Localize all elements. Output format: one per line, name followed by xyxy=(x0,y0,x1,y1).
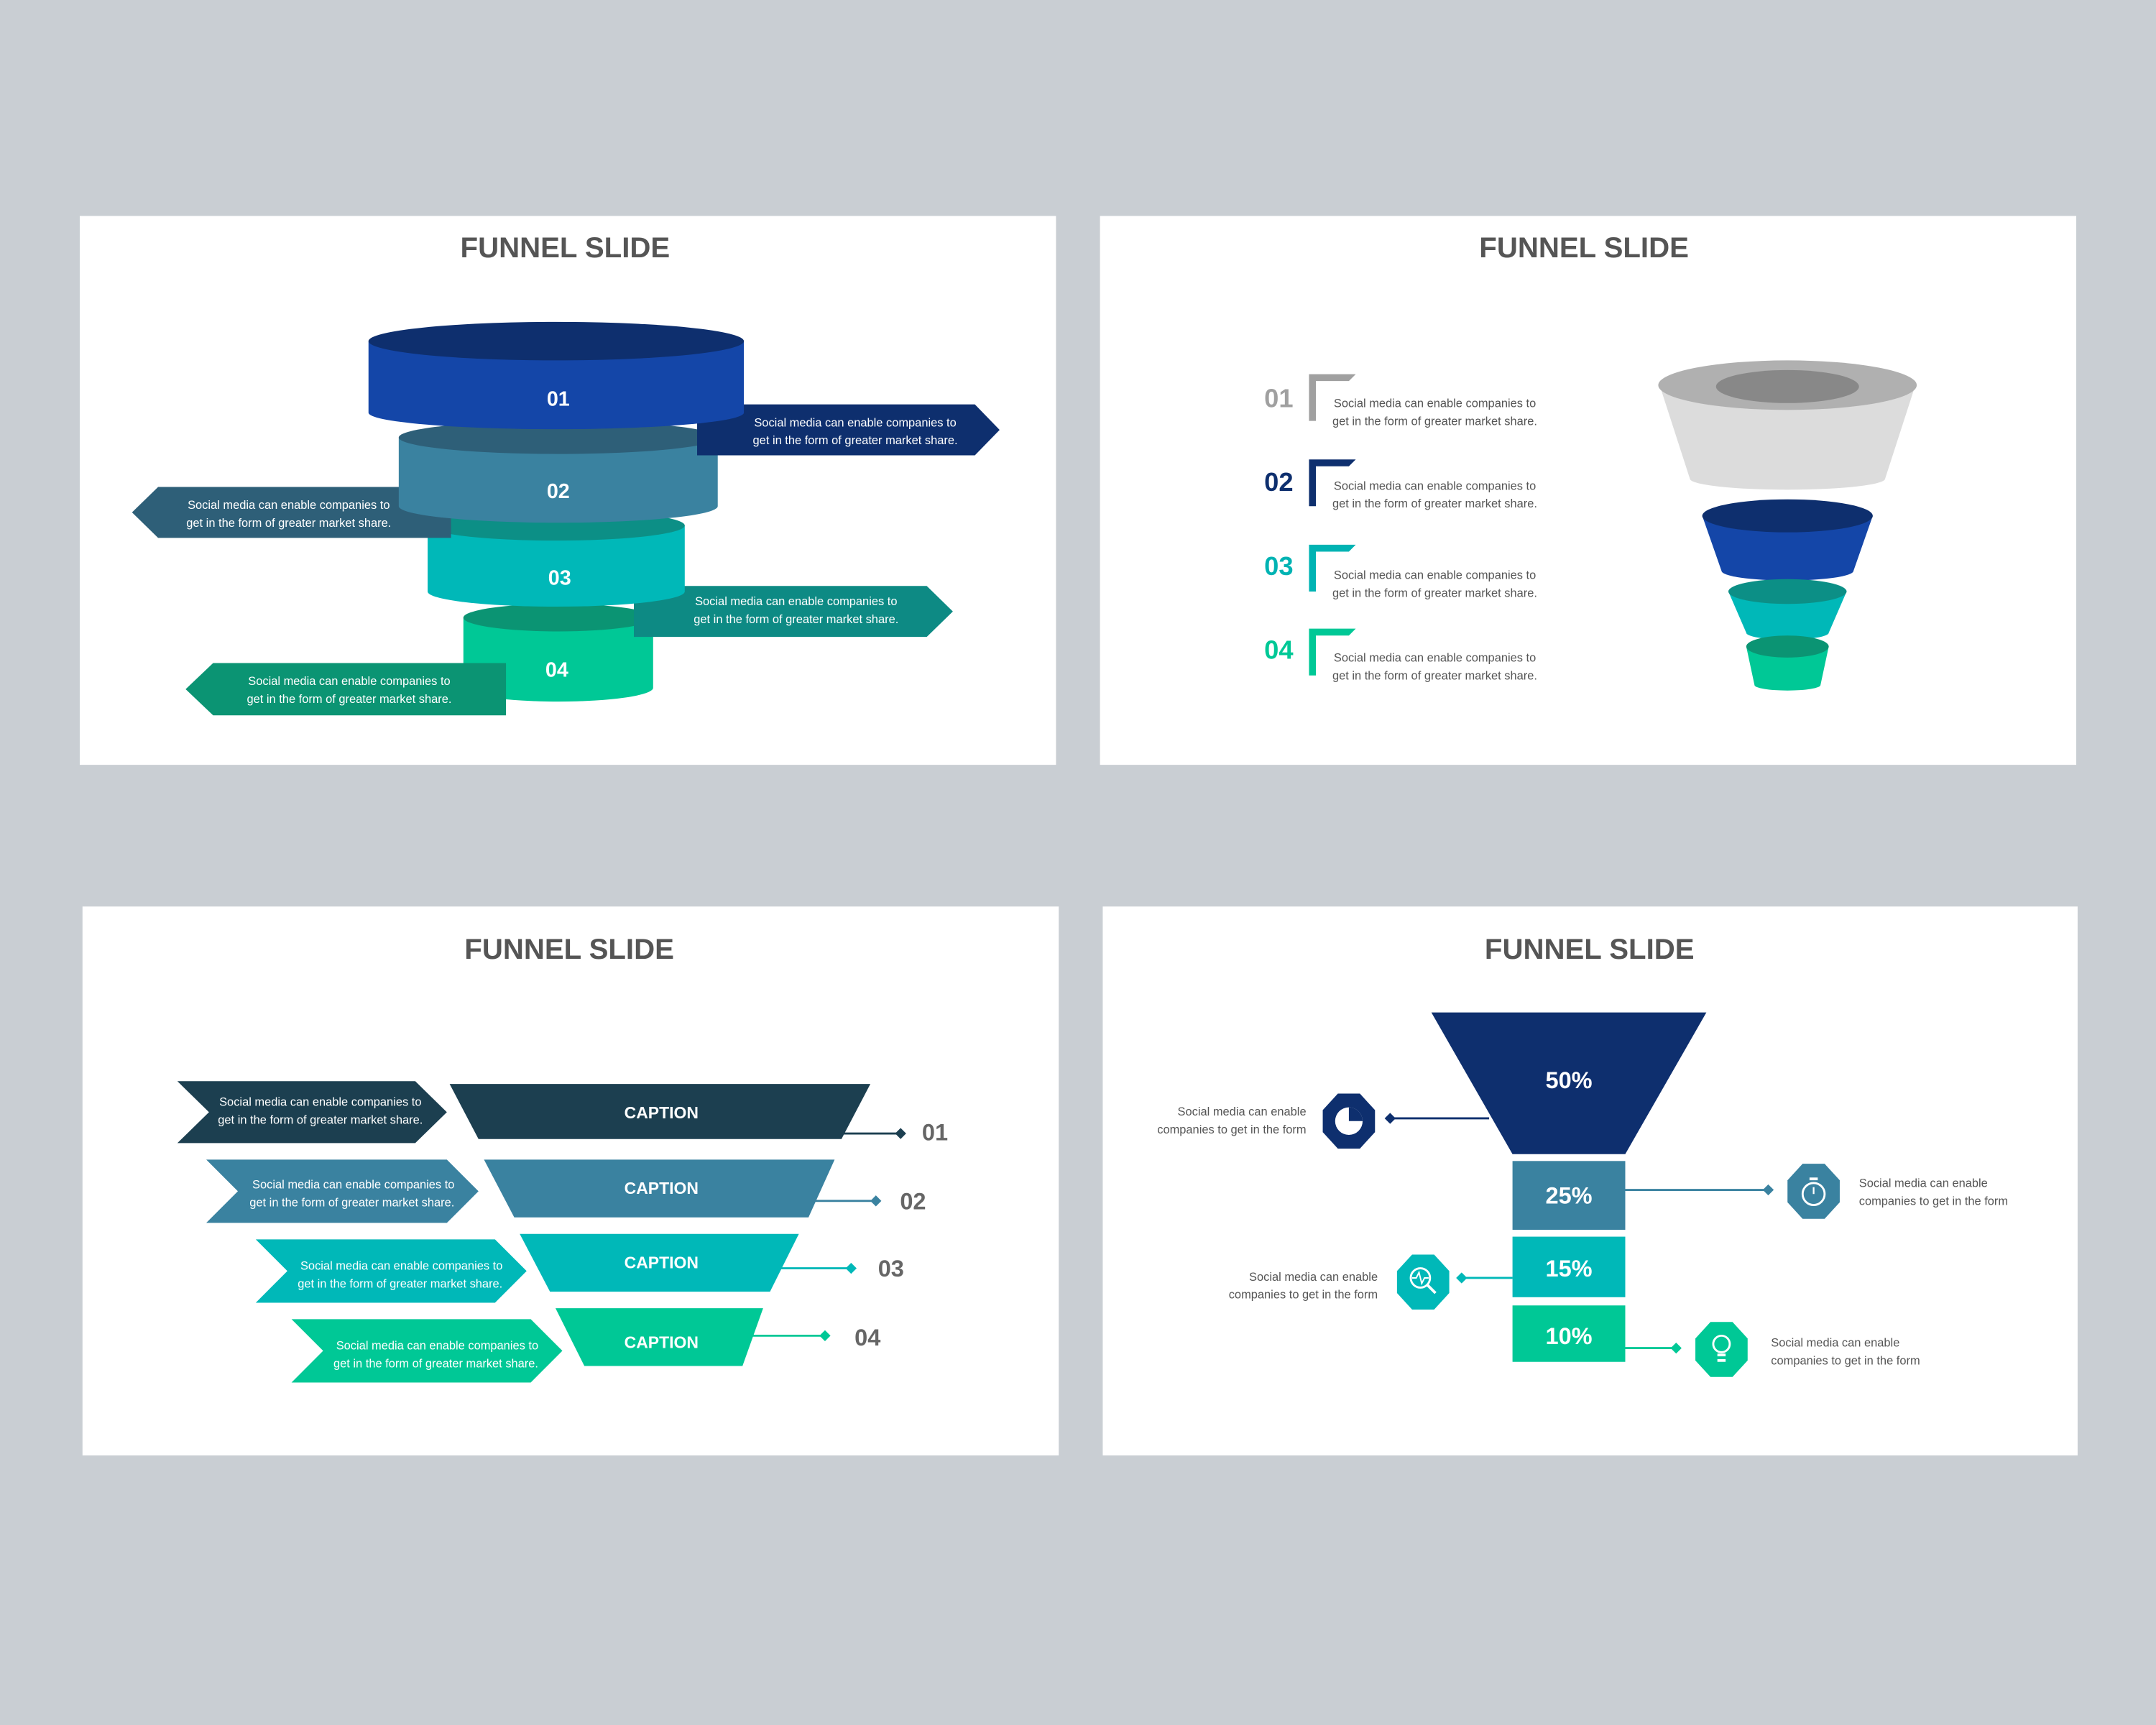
funnel 50% xyxy=(1432,1013,1706,1154)
heading: FUNNEL SLIDE xyxy=(464,933,674,965)
callout 1 xyxy=(697,405,1000,455)
callout 1: get in the form of greater market share. xyxy=(753,434,958,447)
bar 15%: 15% xyxy=(1545,1256,1593,1282)
funnel 50%: 50% xyxy=(1545,1067,1593,1093)
funnel: gray top xyxy=(1658,360,1917,489)
item 02: 02 xyxy=(1264,467,1294,497)
row 04: Social media can enable companies to xyxy=(336,1340,538,1353)
bar 10%: 10% xyxy=(1545,1323,1593,1349)
row 02: get in the form of greater market share. xyxy=(249,1196,454,1209)
item 03: 03 xyxy=(1264,551,1294,581)
bar 25% xyxy=(1513,1161,1625,1230)
row 01: Social media can enable companies to xyxy=(219,1096,421,1109)
item 04: get in the form of greater market share. xyxy=(1332,669,1537,682)
row 02 xyxy=(206,1159,926,1223)
callout 3: Social media can enable companies to xyxy=(695,595,897,608)
callout: stopwatch: Social media can enable xyxy=(1859,1177,1988,1190)
callout: lightbulb: Social media can enable xyxy=(1771,1337,1899,1350)
callout 4: get in the form of greater market share. xyxy=(247,693,451,706)
item 02: Social media can enable companies to xyxy=(1334,479,1536,492)
callout 1: Social media can enable companies to xyxy=(754,416,957,429)
row 04: get in the form of greater market share. xyxy=(333,1357,538,1370)
funnel: blue xyxy=(1703,500,1873,581)
callout: pie chart: companies to get in the form xyxy=(1157,1123,1307,1136)
row 02: CAPTION xyxy=(625,1179,699,1197)
callout: magnifier: companies to get in the form xyxy=(1229,1289,1378,1302)
callout: pie chart: Social media can enable xyxy=(1178,1105,1307,1118)
item 03 xyxy=(1264,545,1537,600)
item 04 xyxy=(1264,629,1537,682)
callout: lightbulb xyxy=(1625,1322,1920,1377)
callout 4: Social media can enable companies to xyxy=(248,675,451,688)
row 02: 02 xyxy=(900,1188,926,1214)
heading: FUNNEL SLIDE xyxy=(1479,231,1689,264)
row 04: 04 xyxy=(854,1325,880,1351)
item 01: 01 xyxy=(1264,384,1294,413)
heading: FUNNEL SLIDE xyxy=(1485,933,1695,965)
callout: stopwatch: companies to get in the form xyxy=(1859,1195,2008,1208)
bar 15% xyxy=(1513,1237,1625,1297)
callout 2: get in the form of greater market share. xyxy=(186,517,391,530)
item 02 xyxy=(1264,459,1537,510)
row 03: 03 xyxy=(878,1256,904,1282)
item 01: Social media can enable companies to xyxy=(1334,397,1536,410)
bar 25%: 25% xyxy=(1545,1183,1593,1209)
row 01: 01 xyxy=(922,1120,948,1146)
callout 2: Social media can enable companies to xyxy=(188,499,390,512)
cylinder 2 xyxy=(399,421,718,523)
cylinder 1: 01 xyxy=(547,388,570,411)
item 01: get in the form of greater market share. xyxy=(1332,415,1537,428)
panel: caption funnel xyxy=(83,906,1059,1455)
panel: cylinder funnel xyxy=(80,216,1056,765)
cylinder 2: 02 xyxy=(547,480,570,503)
callout: magnifier xyxy=(1229,1254,1513,1310)
cylinder 3 xyxy=(428,510,685,607)
item 02: get in the form of greater market share. xyxy=(1332,497,1537,510)
panel: percentage funnel xyxy=(1102,906,2078,1455)
heading: FUNNEL SLIDE xyxy=(461,231,670,264)
cylinder 4 xyxy=(464,604,653,702)
panel: numbered list funnel xyxy=(1100,216,2076,765)
row 04 xyxy=(292,1308,880,1382)
callout 3 xyxy=(634,586,953,637)
item 04: Social media can enable companies to xyxy=(1334,652,1536,665)
row 01: CAPTION xyxy=(625,1103,699,1122)
callout: stopwatch xyxy=(1625,1164,2008,1219)
funnel: green xyxy=(1746,635,1829,691)
callout 2 xyxy=(132,487,451,538)
row 03: Social media can enable companies to xyxy=(300,1260,502,1273)
row 03: get in the form of greater market share. xyxy=(298,1277,502,1290)
row 04: CAPTION xyxy=(625,1333,699,1352)
item 03: get in the form of greater market share. xyxy=(1332,587,1537,600)
row 01 xyxy=(178,1081,948,1146)
item 03: Social media can enable companies to xyxy=(1334,569,1536,582)
callout 3: get in the form of greater market share. xyxy=(694,613,898,626)
row 03 xyxy=(256,1234,904,1302)
callout: lightbulb: companies to get in the form xyxy=(1771,1355,1920,1368)
cylinder 3: 03 xyxy=(548,566,571,589)
callout 4 xyxy=(185,663,506,715)
row 03: CAPTION xyxy=(625,1254,699,1272)
cylinder 4: 04 xyxy=(545,659,568,682)
row 02: Social media can enable companies to xyxy=(252,1179,454,1192)
funnel: teal xyxy=(1728,579,1847,640)
cylinder 1 xyxy=(369,322,744,429)
callout: pie chart xyxy=(1157,1094,1489,1149)
bar 10% xyxy=(1513,1305,1625,1362)
item 01 xyxy=(1264,374,1537,428)
item 04: 04 xyxy=(1264,635,1294,665)
row 01: get in the form of greater market share. xyxy=(218,1114,423,1127)
callout: magnifier: Social media can enable xyxy=(1249,1271,1378,1284)
